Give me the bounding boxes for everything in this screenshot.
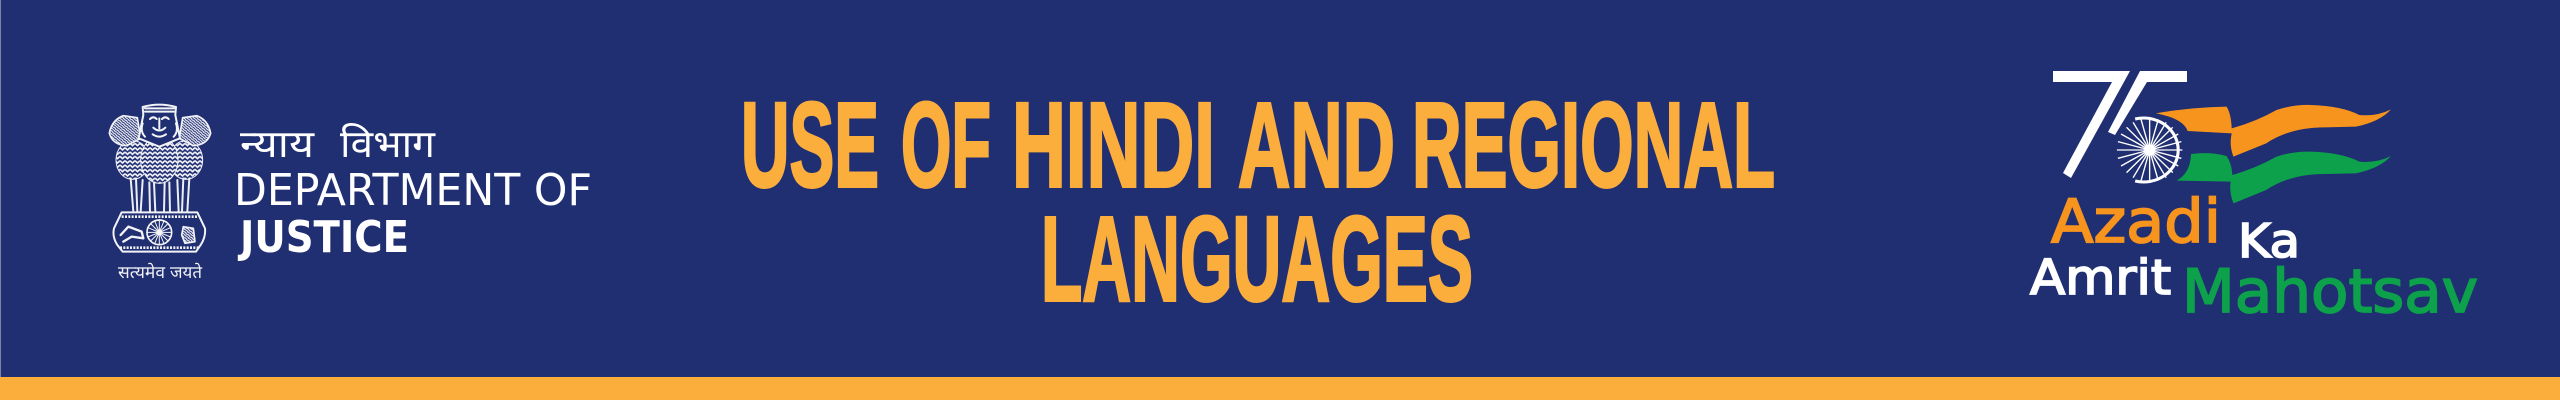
numeral 7 [2053, 71, 2130, 178]
title line 1: AND [1238, 76, 1395, 212]
hindi department name [240, 122, 436, 166]
hindi word 2: विभाग [340, 122, 436, 166]
icon: ashoka chakra [2117, 118, 2182, 182]
flag: saffron band [2156, 105, 2391, 157]
azadi ka amrit mahotsav logo [2030, 71, 2478, 327]
motto word 2: जयते [170, 262, 202, 282]
justice: JUSTICE [237, 212, 409, 263]
title line 1: USE [741, 76, 879, 212]
title line 1: OF [901, 76, 991, 212]
left edge hairline [0, 0, 1, 377]
azadi: Azadi [2051, 187, 2221, 257]
numeral 5 stroke [2108, 71, 2187, 135]
horse [121, 227, 143, 242]
right lion head [179, 116, 211, 146]
mahotsav: Mahotsav [2182, 257, 2478, 327]
title line 1 [741, 76, 1775, 212]
centre lion chest [141, 137, 178, 183]
abacus bands [120, 217, 199, 248]
abacus wheel [147, 220, 172, 245]
title line 1: HINDI [1012, 76, 1215, 212]
left lion chest [116, 141, 149, 179]
centre lion head [139, 105, 180, 147]
abacus [113, 212, 205, 252]
title [741, 76, 1775, 326]
motto word 1: सत्यमेव [118, 262, 166, 282]
bull [182, 227, 195, 243]
icon: national emblem [109, 105, 211, 252]
logo wordmark [2030, 187, 2478, 327]
ka: Ka [2238, 214, 2300, 268]
department of: DEPARTMENT OF [234, 165, 592, 216]
bottom accent bar [0, 377, 2560, 400]
amrit: Amrit [2030, 250, 2171, 306]
department logo [109, 105, 592, 282]
flag: green band [2177, 152, 2391, 203]
hindi word 1: न्याय [240, 124, 315, 166]
emblem motto [118, 262, 202, 282]
right lion chest [169, 141, 203, 179]
title line 1: REGIONAL [1412, 76, 1775, 212]
title line 2: LANGUAGES [1041, 190, 1473, 326]
left lion head [109, 116, 141, 146]
centre lion face [142, 108, 177, 137]
legs [131, 178, 189, 212]
logo mark [2117, 105, 2391, 203]
